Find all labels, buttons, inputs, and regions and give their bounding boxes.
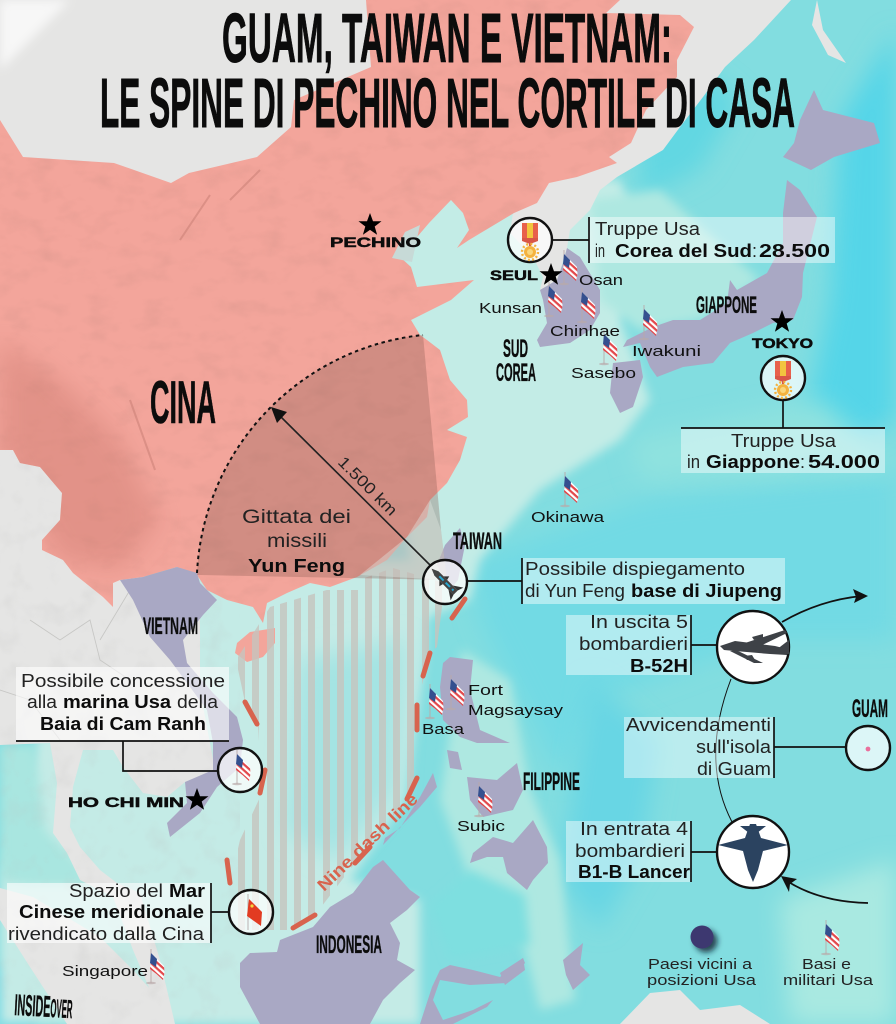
South China Sea striped claim area: [238, 560, 442, 935]
callout: Yun Feng deployment: di Yun Feng: [525, 581, 625, 601]
land: partner countries in purple: [120, 90, 880, 1024]
callout: South China Sea claim: [7, 881, 273, 944]
callout: troops Japan: in: [687, 452, 700, 472]
capitals: [68, 213, 813, 810]
missile range text: Yun Feng: [248, 556, 345, 576]
capitals: HO CHI MIN: [68, 794, 184, 810]
callout: Cam Ranh bay: Baia di Cam Ranh: [40, 714, 206, 734]
legend: US bases: [783, 920, 874, 989]
shallow seas: [0, 160, 760, 1024]
missile range text: [242, 507, 351, 576]
base names: Sasebo: [571, 365, 636, 382]
callout: troops Japan: :: [800, 452, 805, 472]
callout: troops Japan: Giappone: [706, 452, 800, 472]
missile range text: Gittata dei: [242, 507, 351, 528]
callout: troops Japan: 54.000: [808, 452, 880, 472]
capitals: PECHINO: [330, 234, 421, 250]
callout: B1-B Lancer incoming: [566, 816, 789, 888]
callout: B-52H outgoing: bombardieri: [579, 634, 688, 654]
callout: troops South Korea: :: [752, 241, 757, 261]
base names: Subic: [457, 818, 506, 835]
flight paths: [716, 589, 868, 903]
callout: Yun Feng deployment: Possibile dispiegamento: [525, 559, 745, 579]
callout: troops South Korea: Corea del Sud: [615, 241, 752, 261]
base names: Basa: [422, 721, 465, 738]
callout: Guam rotations: sull'isola: [696, 737, 772, 757]
icon: B-52 bomber: [720, 630, 789, 663]
callout: Guam rotations: Avvicendamenti: [626, 715, 771, 735]
callout: Cam Ranh bay: alla: [27, 692, 58, 712]
base names: Chinhae: [550, 323, 620, 340]
base names: Iwakuni: [632, 343, 701, 360]
country labels: INDONESIA: [316, 931, 382, 959]
map infographic: CINA: [150, 369, 216, 436]
Bohai grey gulf patch: [392, 225, 420, 262]
callout: South China Sea claim: Spazio del: [69, 881, 163, 901]
base names: Osan: [579, 272, 623, 289]
callout: B1-B Lancer incoming: bombardieri: [575, 841, 685, 861]
base names: [62, 272, 701, 980]
range arrow: [271, 407, 430, 565]
callout: South China Sea claim: Cinese meridionale: [19, 902, 204, 922]
legend: neighbouring countries: posizioni Usa: [647, 972, 757, 989]
Nine dash line label: Nine dash line: [314, 790, 422, 895]
callout: Cam Ranh bay: [16, 667, 262, 792]
icon: missile: [425, 562, 463, 600]
callout: Cam Ranh bay: Possibile concessione: [21, 671, 225, 691]
callout: troops Japan: [681, 356, 885, 473]
legend: neighbouring countries: Paesi vicini a: [648, 956, 753, 973]
callout: Cam Ranh bay: della: [177, 692, 219, 712]
callout: B-52H outgoing: [566, 611, 789, 683]
country labels: SUD: [503, 335, 528, 363]
Nine dash line: [227, 599, 465, 928]
callout: B1-B Lancer incoming: B1-B Lancer: [578, 862, 690, 882]
missile range text: missili: [267, 531, 327, 552]
callout: B-52H outgoing: In uscita 5: [590, 612, 688, 632]
capitals: SEUL: [490, 267, 539, 283]
callout: troops South Korea: 28.500: [759, 241, 830, 261]
callout: troops South Korea: in: [595, 241, 605, 261]
icon: Chinese flag: [247, 894, 262, 930]
callout: troops Japan: Truppe Usa: [731, 431, 837, 451]
base names: Magsaysay: [468, 702, 564, 719]
base names: Fort: [468, 682, 504, 699]
dotted range arc: [197, 335, 423, 573]
callout: troops South Korea: Truppe Usa: [595, 219, 701, 239]
callout: Guam rotations: [624, 715, 890, 779]
legend: US bases: militari Usa: [783, 972, 874, 989]
callout: Cam Ranh bay: marina Usa: [63, 692, 172, 712]
callout: South China Sea claim: rivendicato dalla Cina: [8, 924, 205, 944]
country labels: GIAPPONE: [696, 292, 757, 319]
country labels: [143, 292, 888, 959]
country labels: FILIPPINE: [523, 768, 580, 796]
callout: Yun Feng deployment: [423, 558, 785, 604]
land: China: [0, 0, 694, 662]
logo InsideOver: [14, 989, 73, 1024]
capitals: TOKYO: [752, 335, 813, 351]
callout: troops South Korea: [508, 217, 835, 263]
callout: B1-B Lancer incoming: In entrata 4: [580, 819, 688, 839]
callout: Guam rotations: di Guam: [697, 759, 771, 779]
callout: B-52H outgoing: B-52H: [630, 656, 688, 676]
title: [100, 0, 795, 142]
legend: neighbouring countries: [647, 926, 757, 989]
country labels: COREA: [496, 359, 536, 387]
base names: Kunsan: [479, 300, 542, 317]
range label: 1.500 km: [334, 454, 400, 520]
callout: South China Sea claim: Mar: [169, 881, 205, 901]
callout: Yun Feng deployment: base di Jiupeng: [631, 581, 782, 601]
icon: B1-B bomber: [718, 824, 788, 882]
US base flags: [146, 250, 658, 984]
base names: Singapore: [62, 963, 148, 980]
country labels: VIETNAM: [143, 613, 198, 640]
country labels: TAIWAN: [453, 528, 502, 555]
grey land texture: [0, 0, 240, 1024]
missile range sector: [197, 335, 447, 580]
base names: Okinawa: [531, 509, 605, 526]
legend: US bases: Basi e: [802, 956, 851, 973]
